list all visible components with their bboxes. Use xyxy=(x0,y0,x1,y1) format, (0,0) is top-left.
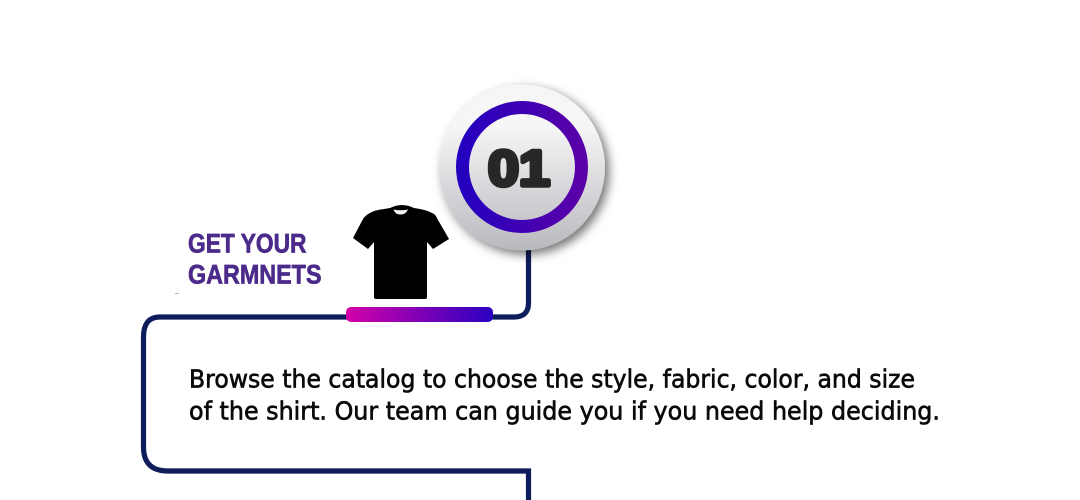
heading: GARMNETS xyxy=(188,260,322,290)
icon: t-shirt xyxy=(353,205,449,299)
gradient bar xyxy=(346,307,493,322)
badge ring xyxy=(462,108,582,226)
connector line xyxy=(144,245,528,500)
badge disc xyxy=(439,84,605,250)
description text xyxy=(189,364,940,426)
step number badge xyxy=(439,84,605,250)
heading: GET YOUR xyxy=(188,228,306,258)
step number: 01 xyxy=(488,140,550,196)
description text: of the shirt. Our team can guide you if you need help deciding. xyxy=(189,396,940,426)
small mark xyxy=(175,293,179,294)
description text: Browse the catalog to choose the style, fabric, color, and size xyxy=(189,364,915,394)
heading xyxy=(188,228,322,290)
